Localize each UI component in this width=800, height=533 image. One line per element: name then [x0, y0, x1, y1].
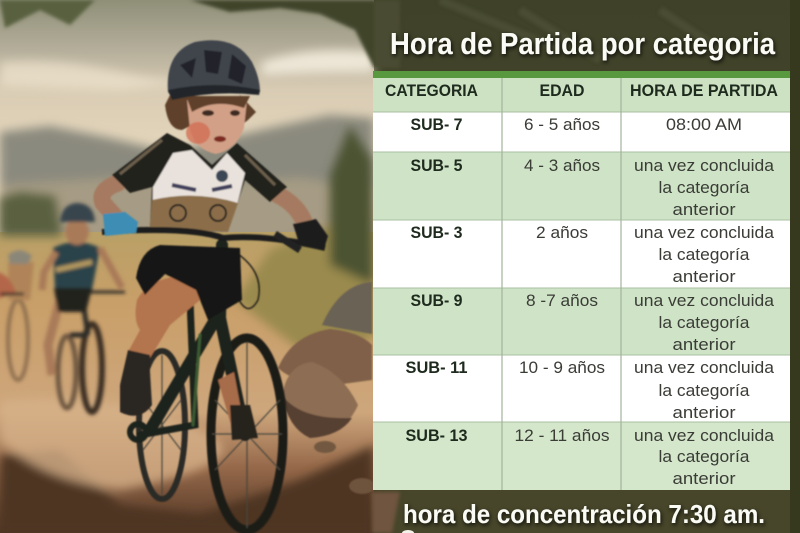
- row SUB-13: [406, 426, 775, 488]
- row SUB-5: una vez concluida: [634, 156, 775, 175]
- header row: [385, 81, 778, 100]
- rear wheel: [139, 351, 185, 499]
- legs and shorts: [120, 245, 258, 440]
- row SUB-3: la categoría: [658, 245, 750, 264]
- row SUB-7: 08:00 AM: [666, 115, 742, 134]
- row SUB-11: SUB- 11: [406, 358, 468, 377]
- row SUB-7: SUB- 7: [410, 115, 462, 134]
- header row: CATEGORIA: [385, 81, 478, 100]
- row SUB-9: SUB- 9: [410, 291, 462, 310]
- row SUB-9: la categoría: [658, 313, 750, 332]
- schedule table: [373, 71, 790, 490]
- row SUB-5: anterior: [672, 200, 736, 219]
- head: [165, 95, 256, 154]
- row SUB-9: una vez concluida: [634, 291, 775, 310]
- row SUB-9: anterior: [672, 335, 736, 354]
- jersey: [112, 133, 287, 232]
- header row: EDAD: [540, 81, 584, 100]
- row SUB-13: SUB- 13: [406, 426, 468, 445]
- rider 3: [0, 250, 34, 380]
- rocks: [278, 282, 375, 494]
- main rider with bike: [102, 40, 328, 530]
- helmet: [168, 40, 260, 100]
- row SUB-13: anterior: [672, 469, 736, 488]
- row SUB-5: [410, 156, 775, 219]
- row SUB-3: 2 años: [536, 223, 588, 242]
- row SUB-11: 10 - 9 años: [519, 358, 605, 377]
- bike frame: [130, 245, 259, 440]
- row SUB-11: una vez concluida: [634, 358, 775, 377]
- row SUB-11: la categoría: [658, 381, 750, 400]
- row SUB-13: una vez concluida: [634, 426, 775, 445]
- handlebar and gloves: [102, 212, 328, 250]
- row SUB-3: SUB- 3: [410, 223, 462, 242]
- row SUB-5: SUB- 5: [410, 156, 462, 175]
- row SUB-3: [410, 223, 775, 286]
- row SUB-13: la categoría: [658, 447, 750, 466]
- cropped white mark at bottom edge: [402, 530, 414, 533]
- rider 2: [42, 203, 125, 412]
- row SUB-3: una vez concluida: [634, 223, 775, 242]
- front wheel: [211, 338, 283, 530]
- row SUB-11: [406, 358, 775, 422]
- table frame and row fills: [373, 71, 790, 490]
- right edge shade: [790, 0, 800, 533]
- row SUB-9: [410, 291, 775, 354]
- row SUB-5: 4 - 3 años: [524, 156, 600, 175]
- row SUB-3: anterior: [672, 267, 736, 286]
- header row: HORA DE PARTIDA: [630, 81, 778, 100]
- row SUB-13: 12 - 11 años: [514, 426, 610, 445]
- arms: [102, 183, 305, 224]
- row SUB-5: la categoría: [658, 178, 750, 197]
- row SUB-7: [410, 115, 742, 134]
- row SUB-9: 8 -7 años: [526, 291, 598, 310]
- row SUB-11: anterior: [672, 403, 736, 422]
- row SUB-7: 6 - 5 años: [524, 115, 600, 134]
- footer note: hora de concentración 7:30 am.: [403, 499, 765, 529]
- background riders: [0, 203, 125, 412]
